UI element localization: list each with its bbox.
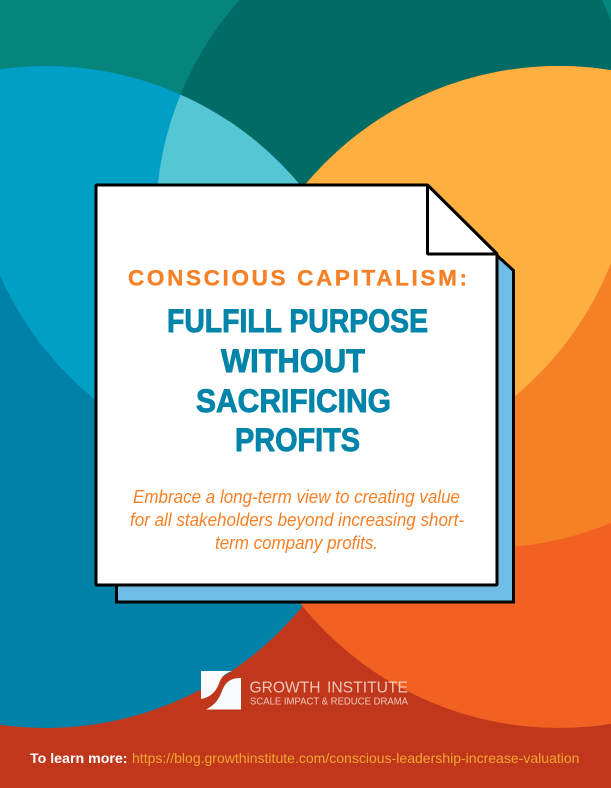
footer link: https://blog.growthinstitute.com/conscious-leadership-increase-valuation xyxy=(132,750,580,766)
title: PROFITS xyxy=(235,422,360,458)
title: FULFILL PURPOSE xyxy=(167,303,428,339)
logo wordmark: GROWTH xyxy=(250,680,320,697)
page fold xyxy=(428,185,497,254)
back sheet xyxy=(116,240,514,602)
logo wordmark xyxy=(250,680,408,707)
icon: growth institute logo mark xyxy=(201,671,241,710)
title xyxy=(167,303,428,458)
front sheet xyxy=(96,185,497,585)
subtitle text block: Embrace a long-term view to creating value xyxy=(133,487,460,507)
footer link: To learn more: xyxy=(30,750,127,766)
logo wordmark: INSTITUTE xyxy=(327,680,408,697)
subtitle text block xyxy=(130,487,464,553)
title: SACRIFICING xyxy=(196,383,391,419)
subtitle text block: term company profits. xyxy=(215,533,378,553)
subtitle text block: for all stakeholders beyond increasing short- xyxy=(130,510,464,530)
logo wordmark: SCALE IMPACT & REDUCE DRAMA xyxy=(250,696,408,707)
heading: conscious capitalism: CONSCIOUS CAPITALISM: xyxy=(128,266,467,290)
title: WITHOUT xyxy=(221,343,365,379)
panel: paper card xyxy=(96,185,514,602)
